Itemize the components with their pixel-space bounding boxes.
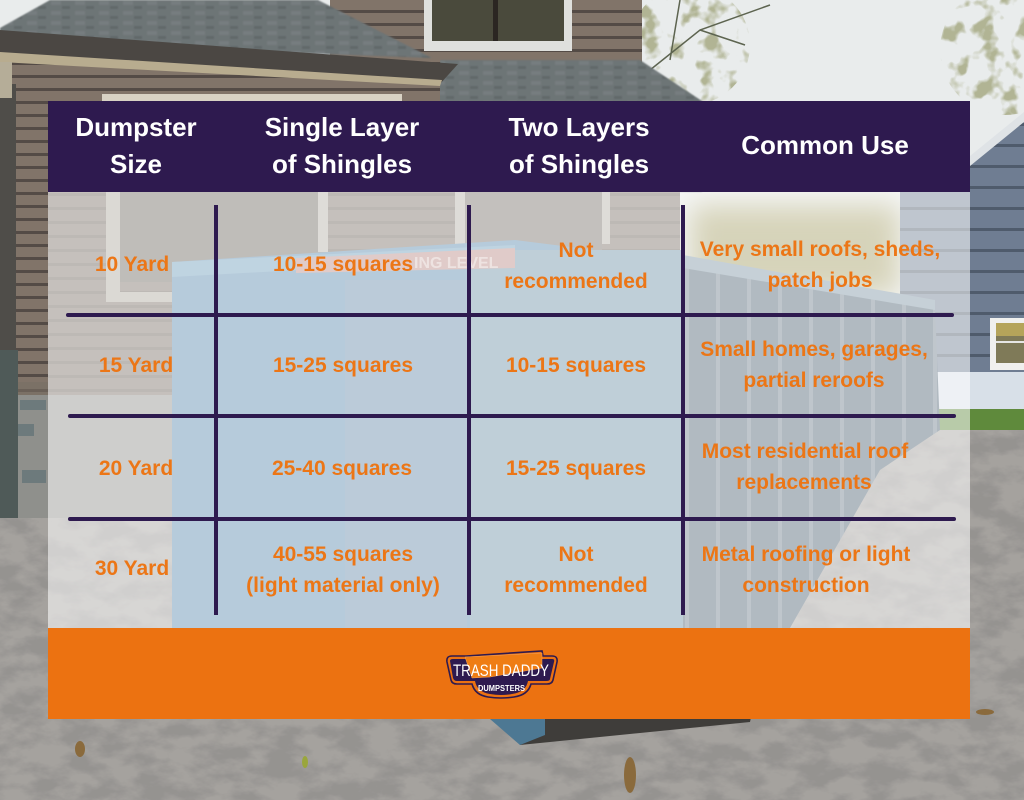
row: 30 Yard: (light material only) — [246, 574, 440, 597]
row: 10 Yard: Very small roofs, sheds, — [700, 238, 940, 261]
main roof — [0, 0, 432, 58]
translucent table panel — [48, 192, 970, 628]
row: 15 Yard — [99, 338, 928, 392]
upper siding and window — [330, 0, 642, 70]
row: 30 Yard: 40-55 squares — [273, 543, 413, 566]
row: 10 Yard: 10 Yard — [95, 253, 169, 276]
row: 15 Yard: 15 Yard — [99, 354, 173, 377]
row: 15 Yard: Small homes, garages, — [700, 338, 928, 361]
row: 15 Yard: 15-25 squares — [273, 354, 413, 377]
row: 30 Yard: construction — [742, 574, 870, 597]
lower roof — [430, 60, 702, 192]
row: 20 Yard — [99, 440, 908, 494]
row: 10 Yard: recommended — [504, 270, 648, 293]
row: 15 Yard: 10-15 squares — [506, 354, 646, 377]
row: 20 Yard: 20 Yard — [99, 457, 173, 480]
windows behind the panel — [106, 192, 172, 302]
heading: Dumpster Size: Dumpster — [75, 112, 197, 142]
sky — [0, 0, 1024, 440]
loading level sign on dumpster — [296, 248, 515, 273]
row: 20 Yard: 25-40 squares — [272, 457, 412, 480]
heading: Two Layers of Shingles — [508, 112, 650, 179]
trees — [630, 0, 1024, 115]
header bar — [48, 101, 970, 192]
dumpster base under panel — [490, 628, 770, 745]
heading: Dumpster Size: Size — [110, 149, 162, 179]
heading: Two Layers of Shingles: of Shingles — [509, 149, 649, 179]
dumpster body — [172, 240, 690, 628]
loading level sign on dumpster: ING LEVEL — [414, 255, 499, 272]
heading: Single Layer of Shingles: Single Layer — [265, 112, 419, 142]
row: 30 Yard: 30 Yard — [95, 557, 169, 580]
row: 30 Yard: recommended — [504, 574, 648, 597]
leaves and debris — [75, 709, 994, 793]
row: 20 Yard: 15-25 squares — [506, 457, 646, 480]
row: 20 Yard: replacements — [736, 471, 872, 494]
row: 10 Yard: patch jobs — [767, 269, 872, 292]
heading: Common Use: Common Use — [741, 130, 909, 160]
stone column — [0, 84, 16, 404]
row: 10 Yard: Not — [558, 239, 594, 262]
logo: Trash Daddy Dumpsters: DUMPSTERS — [478, 684, 526, 693]
footer bar — [48, 628, 970, 719]
row: 10 Yard — [95, 238, 940, 293]
row: 30 Yard: Not — [558, 543, 594, 566]
sand ground — [0, 430, 1024, 800]
right house — [900, 115, 1024, 372]
row: 30 Yard — [95, 543, 910, 597]
eaves — [0, 30, 458, 84]
logo: Trash Daddy Dumpsters — [446, 650, 558, 699]
heading: Single Layer of Shingles: of Shingles — [272, 149, 412, 179]
heading: Single Layer of Shingles — [265, 112, 419, 179]
house wall — [0, 58, 440, 102]
heading: Dumpster Size — [75, 112, 197, 179]
row: 15 Yard: partial reroofs — [743, 369, 885, 392]
row: 10 Yard: 10-15 squares — [273, 253, 413, 276]
row: 30 Yard: Metal roofing or light — [702, 543, 910, 566]
row: 20 Yard: Most residential roof — [702, 440, 908, 463]
heading: Two Layers of Shingles: Two Layers — [508, 112, 650, 142]
trees behind the panel — [690, 205, 900, 295]
